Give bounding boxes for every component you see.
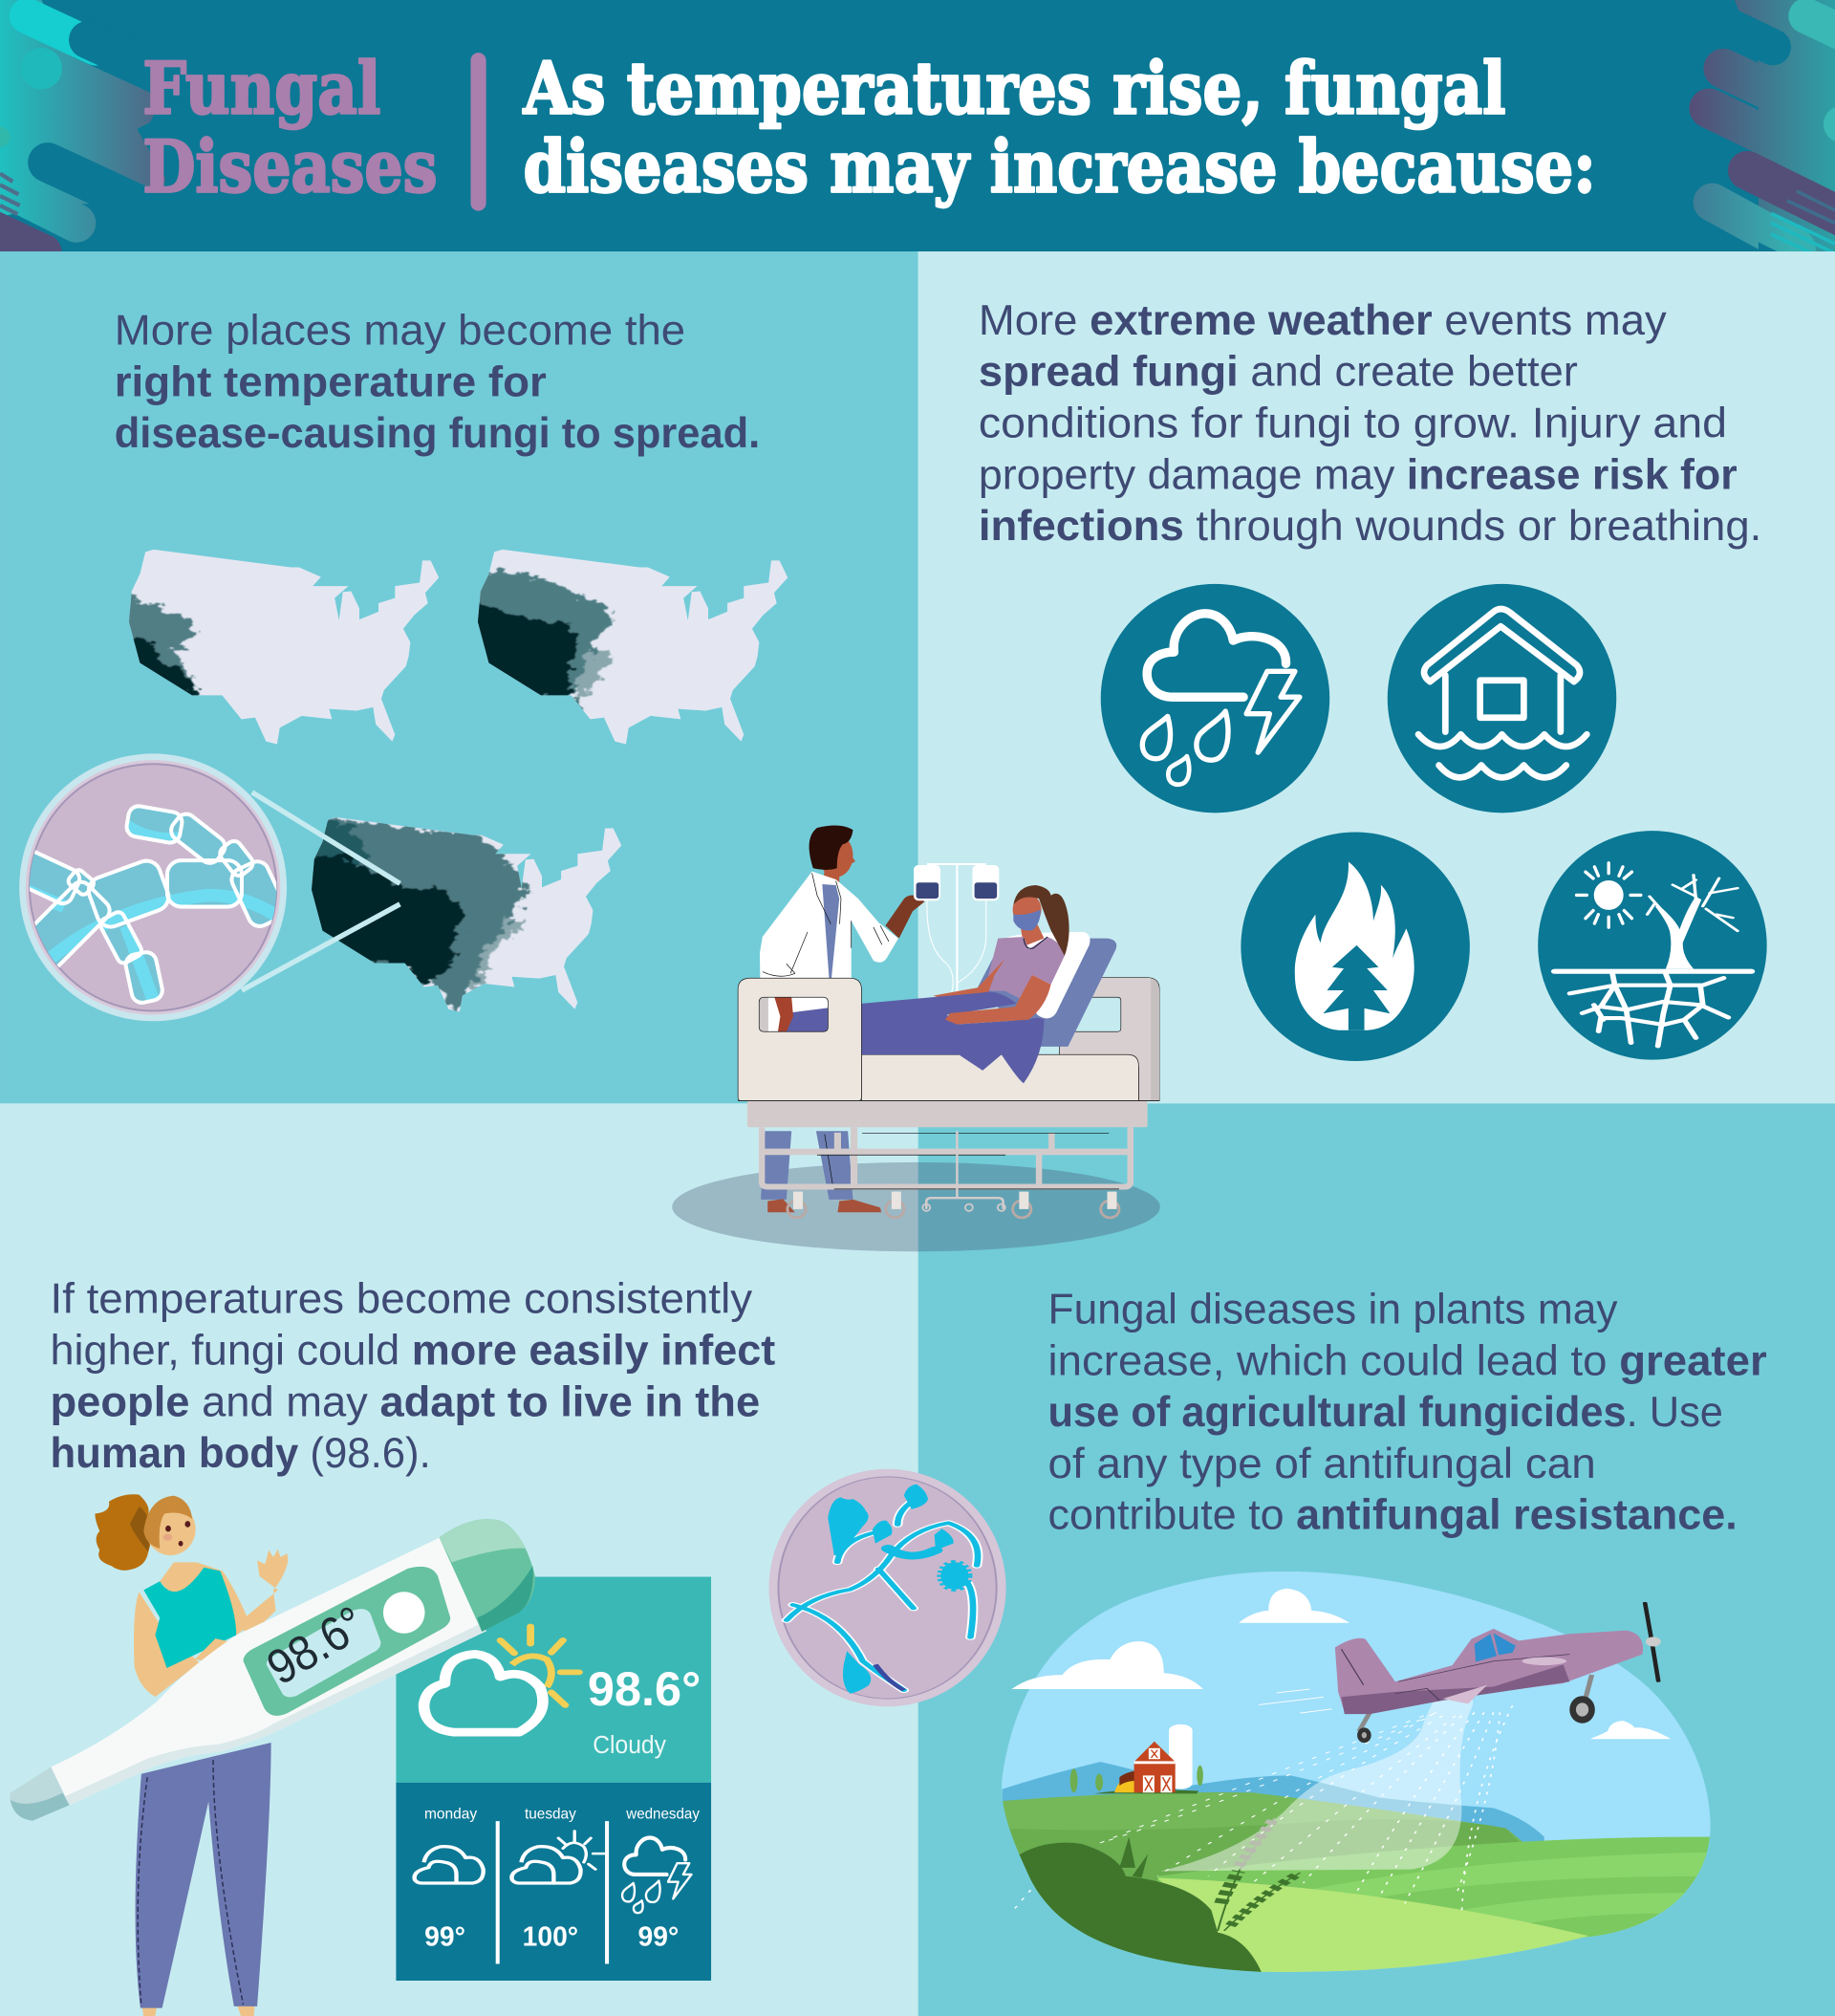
doctor (760, 825, 924, 1212)
forecast: wednesday: 99° (638, 1921, 679, 1952)
text block: agricultural fungicides: of any type of antifungal can (1048, 1441, 1596, 1487)
text block: right temperature (115, 308, 760, 457)
heading divider (470, 53, 486, 211)
text block: right temperature: More places may become the (115, 308, 685, 355)
floor shadow (672, 1162, 1160, 1251)
forecast: monday (415, 1805, 484, 1952)
sky (986, 1566, 1728, 1979)
text block: agricultural fungicides: increase, which could lead to greater (1048, 1337, 1767, 1384)
headboard rail (1060, 978, 1159, 1101)
thermometer reading: 98.6° (258, 1595, 374, 1695)
header banner (0, 0, 1835, 255)
woman figure (95, 1494, 289, 2016)
fungal hyphae (787, 1501, 978, 1690)
petri dish: fungal growth (769, 1469, 1006, 1706)
text block: human body: people and may adapt to live in the (50, 1378, 760, 1425)
spore heads (828, 1485, 968, 1694)
foot rail (738, 978, 861, 1101)
patient (787, 885, 1069, 1083)
spray plume (1012, 1691, 1513, 1912)
text block: agricultural fungicides (1048, 1286, 1767, 1539)
icon: drought (1538, 831, 1767, 1060)
text block: extreme weather: conditions for fungi to grow. Injury and (979, 400, 1727, 446)
clouds (1012, 1589, 1671, 1739)
text block: extreme weather: More extreme weather events may (979, 297, 1668, 344)
pillow (1004, 932, 1090, 1018)
text block: agricultural fungicides: Fungal diseases in plants may (1048, 1286, 1618, 1333)
farm scene with crop-dusting plane (986, 1566, 1728, 1979)
text block: extreme weather: infections through wounds or breathing. (979, 503, 1761, 550)
backrest (978, 939, 1116, 1047)
text block: agricultural fungicides: contribute to antifungal resistance. (1048, 1492, 1738, 1539)
forecast: tuesday (511, 1805, 607, 1952)
icon: storm (1101, 584, 1329, 813)
text block: human body: If temperatures become consistently (50, 1276, 753, 1323)
text block: agricultural fungicides: use of agricultural fungicides. Use (1048, 1389, 1723, 1436)
heading: Fungal Diseases: Diseases (142, 123, 437, 208)
callout lines from petri dish to map (242, 792, 399, 990)
bed wheels (788, 1192, 1119, 1218)
forecast: wednesday (622, 1805, 701, 1952)
forecast: tuesday: tuesday (525, 1805, 577, 1822)
map: US late-century spread (312, 817, 621, 1012)
icon: flooded house (1388, 584, 1616, 813)
text block: right temperature: disease-causing fungi to spread. (115, 410, 760, 457)
forecast: tuesday: 100° (523, 1921, 578, 1952)
thermometer (10, 1519, 535, 1821)
fields (999, 1792, 1716, 1975)
mattress (861, 1054, 1138, 1101)
forecast: monday: 99° (424, 1921, 465, 1952)
weather panel (396, 1577, 711, 1981)
wheat stalks (1218, 1818, 1300, 1931)
bush (999, 1843, 1263, 1974)
fungal hyphae outline (787, 1501, 978, 1690)
text block: human body: human body (98.6). (50, 1430, 431, 1477)
text block: human body (50, 1276, 776, 1477)
forecast: monday: monday (424, 1805, 478, 1822)
text block: extreme weather: spread fungi and create better (979, 349, 1578, 396)
icon: wildfire (1241, 833, 1470, 1061)
bed frame (762, 1127, 1131, 1187)
left header decoration (0, 0, 166, 251)
icon: large cloud and sun (424, 1626, 579, 1732)
bed base (747, 1101, 1148, 1127)
plane (1259, 1603, 1661, 1743)
heading: Fungal Diseases (142, 45, 437, 208)
IV stand (914, 863, 1005, 1211)
heading: main statement: diseases may increase because: (524, 123, 1596, 208)
right header decoration (1695, 0, 1835, 255)
woman holding thermometer (10, 1494, 535, 2016)
text block: extreme weather (979, 297, 1761, 550)
map: US mid-century spread (459, 550, 788, 744)
heading: main statement: As temperatures rise, fungal (523, 45, 1506, 130)
forecast divider (498, 1821, 607, 1964)
heading: main statement (523, 45, 1596, 208)
current temperature: 98.6° (588, 1662, 701, 1716)
barn and silo (1070, 1724, 1203, 1793)
text block: right temperature: right temperature for (115, 358, 547, 405)
map: US present-day spread (110, 550, 439, 744)
frame shadow lines (817, 1134, 1119, 1189)
condition label: Cloudy (593, 1732, 666, 1759)
text block: human body: higher, fungi could more easily infect (50, 1328, 776, 1375)
heading: Fungal Diseases: Fungal (142, 45, 380, 130)
petri dish: fungal cells (5, 753, 289, 1021)
distant hills (1002, 1762, 1544, 1842)
text block: extreme weather: property damage may increase risk for (979, 451, 1738, 498)
hospital scene illustration (672, 825, 1160, 1251)
forecast: wednesday: wednesday (625, 1805, 701, 1822)
